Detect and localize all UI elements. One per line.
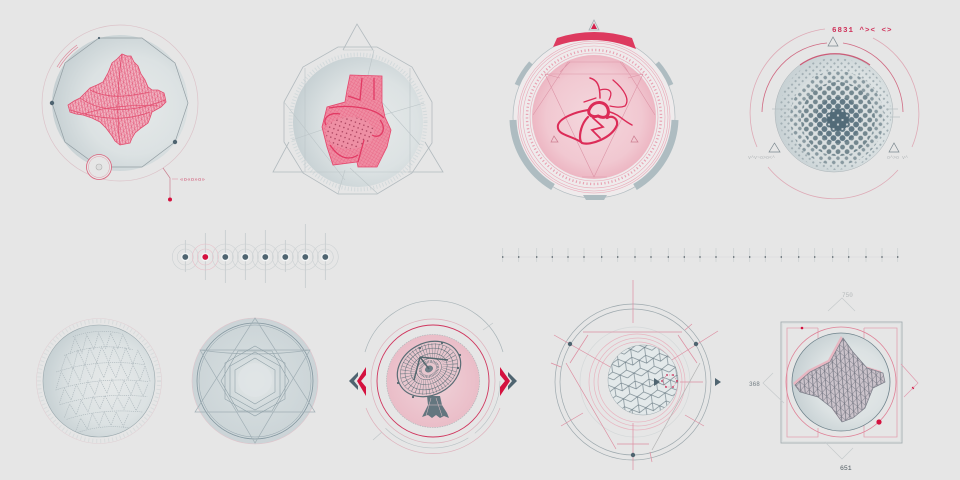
- sphere: [52, 35, 188, 171]
- top code: 750: [842, 292, 853, 299]
- left code: 368: [749, 381, 760, 388]
- chevrons left: [349, 367, 366, 396]
- node dots: [50, 37, 177, 144]
- panel: hexagram sphere: [192, 318, 318, 444]
- panel: terrain wireframe globe: [42, 25, 205, 202]
- panel: target row: [172, 224, 338, 288]
- diagonal ticks: [373, 323, 493, 440]
- pink chevron: [901, 364, 918, 397]
- disc: [513, 36, 675, 198]
- inner red arc: [800, 54, 870, 65]
- panel: anatomy joint globe: [273, 24, 443, 194]
- panel: triangulated sphere: [36, 318, 162, 444]
- sphere: [192, 318, 318, 444]
- panel: radar dish: [349, 301, 517, 454]
- dark rings: [197, 323, 313, 439]
- outer arcs: [365, 301, 503, 352]
- top code text: 6831 ^>< <>: [832, 26, 893, 35]
- rhombus sphere: [608, 345, 678, 415]
- triangle markers: [769, 37, 899, 152]
- tick ring: [39, 321, 159, 441]
- hexagram triangles: [195, 318, 315, 443]
- connector with dot: [163, 168, 178, 202]
- concentric rings: [518, 41, 670, 193]
- triangles: [273, 24, 443, 172]
- middle red arcs: [762, 43, 903, 112]
- timeline ruler: [503, 248, 898, 262]
- joint mesh: [322, 75, 391, 167]
- bottom grey tab: [583, 195, 607, 200]
- left code text: v^v~o>o<^: [748, 155, 775, 161]
- terrain mesh: [68, 54, 166, 145]
- square frame: [781, 322, 902, 443]
- panel: halftone sphere: [748, 26, 919, 199]
- outer ring: [42, 25, 198, 181]
- red dots: [801, 327, 914, 425]
- concentric arcs: [580, 327, 690, 437]
- chevrons: [763, 298, 855, 459]
- grey diagonal: [652, 363, 700, 450]
- code label: «o«o»o»: [180, 176, 205, 183]
- panel: brittle star globe: [513, 20, 675, 200]
- rings: [366, 314, 500, 448]
- pink brackets: [787, 328, 897, 437]
- dish base: [422, 396, 449, 418]
- triangle markers: [654, 378, 721, 386]
- grey terrain mesh: [795, 338, 885, 422]
- dark nodes: [568, 342, 698, 457]
- grey arc segments: [513, 63, 675, 187]
- sphere: [775, 54, 893, 172]
- triangle rows: [52, 328, 153, 434]
- target centres: [182, 253, 329, 261]
- rim knobs: [397, 342, 461, 398]
- stems: [185, 224, 325, 288]
- triangular construction: [533, 62, 655, 177]
- panel: framed terrain: [749, 292, 918, 472]
- centre highlight: [238, 363, 272, 397]
- bottom code: 651: [840, 465, 852, 472]
- pink terrain shadow: [793, 336, 883, 420]
- red construction lines: [551, 280, 718, 470]
- sphere: [792, 333, 890, 431]
- small triangles: [551, 136, 638, 142]
- outer rings: [172, 244, 338, 270]
- top triangle marker: [589, 20, 599, 30]
- nested hexagons: [221, 346, 289, 416]
- tick ring: [290, 54, 426, 190]
- outer pink arcs: [750, 29, 919, 199]
- red arc marker: [57, 45, 78, 68]
- small target: [86, 154, 112, 180]
- red top arc: [553, 32, 636, 49]
- dish struts: [414, 357, 448, 380]
- sphere: [43, 325, 155, 437]
- decagon frame: [52, 38, 188, 167]
- construction lines: [284, 50, 424, 194]
- brittle star: [558, 78, 632, 144]
- sphere: [293, 57, 423, 187]
- pink sphere: [532, 55, 656, 179]
- pink disc: [386, 334, 480, 428]
- dish reflector: [388, 331, 470, 407]
- chevrons right: [500, 367, 517, 396]
- side lines: [772, 109, 900, 117]
- thin outer ring: [36, 318, 162, 444]
- outer rings: [555, 304, 711, 460]
- red hex nodes: [661, 374, 678, 388]
- right code text: o^>o v^: [887, 155, 908, 161]
- halftone dots: [779, 58, 891, 170]
- pink ring: [786, 327, 896, 437]
- dodecagon frame: [284, 47, 432, 194]
- panel: rhombus sphere targeting: [551, 280, 721, 470]
